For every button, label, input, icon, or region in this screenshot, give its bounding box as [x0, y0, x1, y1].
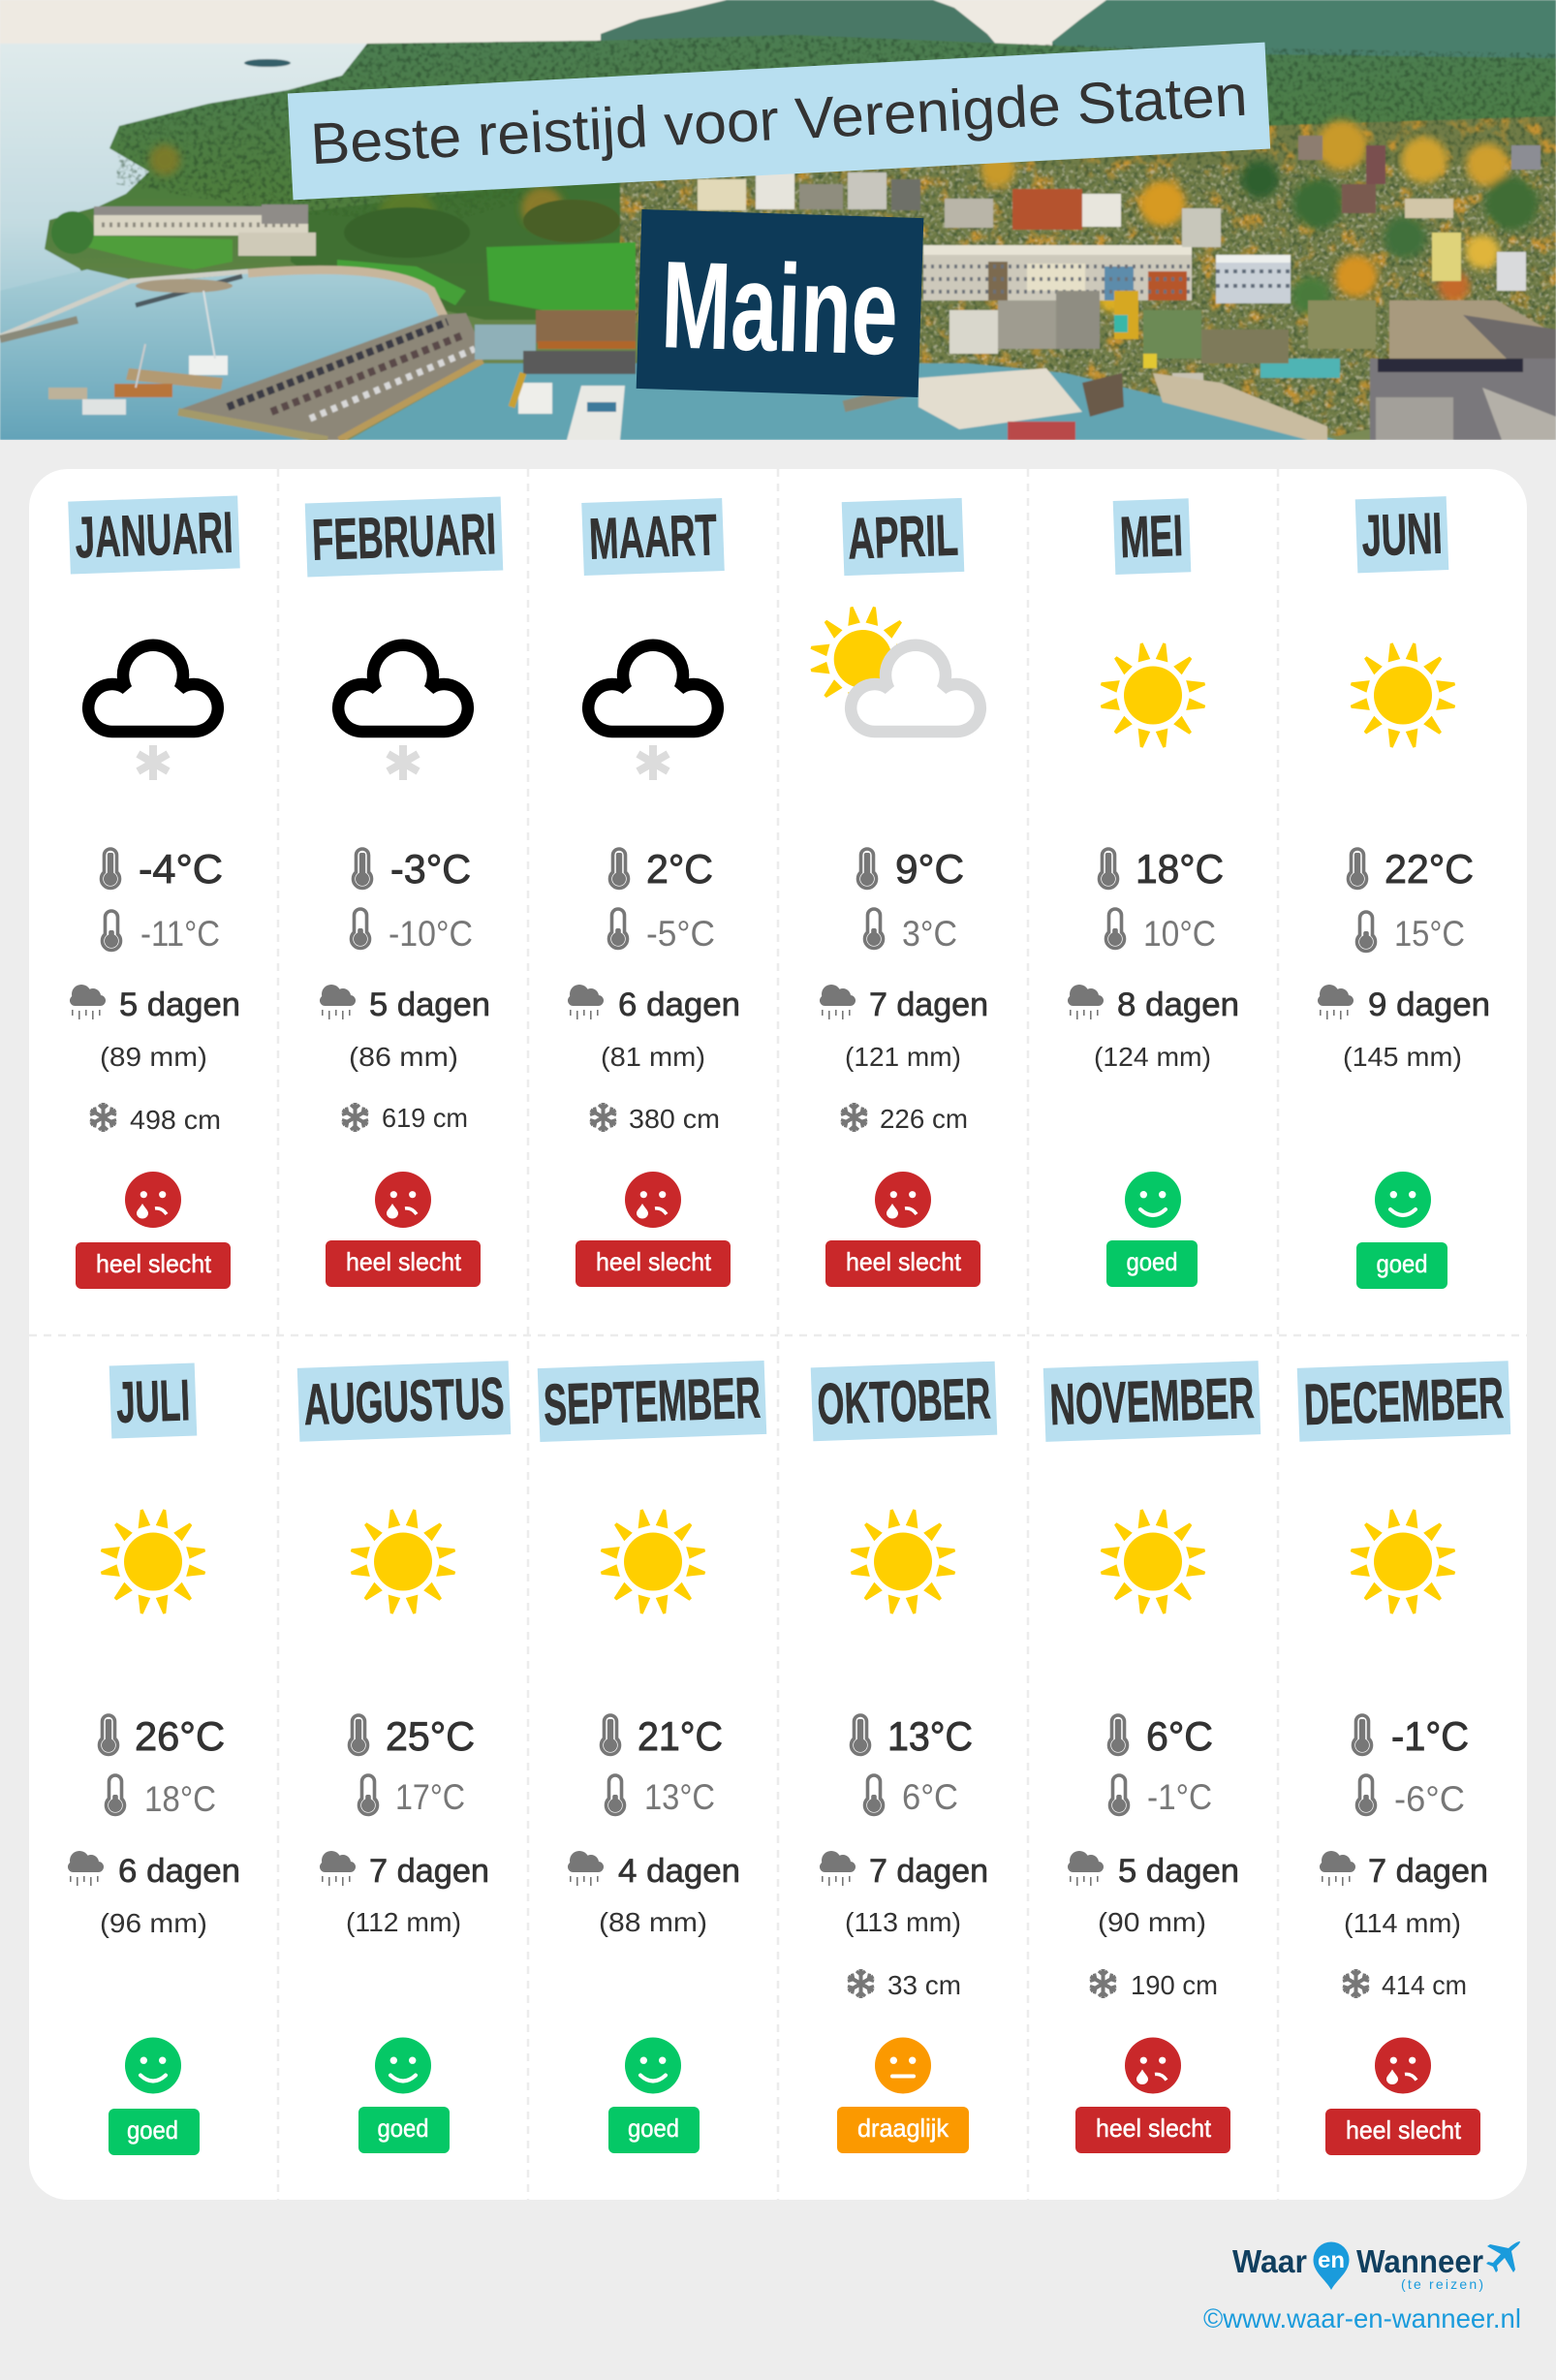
- precipitation: (145 mm): [1343, 1042, 1462, 1072]
- rain days: 6 dagen: [618, 986, 740, 1023]
- icon: thermometer high: [610, 849, 628, 888]
- heading: NOVEMBER: [1048, 1365, 1256, 1437]
- icon: rain: [1320, 1851, 1355, 1886]
- rating face: [1375, 1172, 1431, 1228]
- icon: rain: [320, 985, 356, 1019]
- rating face: [1125, 1172, 1181, 1228]
- website url: ©www.waar-en-wanneer.nl: [1203, 2303, 1521, 2333]
- rating badge: goed: [628, 2114, 679, 2143]
- parking pier: [178, 313, 486, 440]
- icon: map pin: [1314, 2242, 1349, 2290]
- max temperature: 6°C: [1146, 1713, 1213, 1759]
- icon: thermometer low: [607, 1775, 624, 1814]
- rain days: 7 dagen: [869, 986, 988, 1023]
- heading: JANUARI: [74, 500, 234, 570]
- rating face: [125, 2037, 181, 2093]
- min temperature: -6°C: [1394, 1779, 1465, 1819]
- icon: rain: [820, 985, 856, 1019]
- rain days: 5 dagen: [369, 986, 490, 1023]
- rating badge: [608, 2107, 700, 2153]
- title banner: Beste reistijd voor Verenigde Staten: [309, 63, 1249, 176]
- snowfall: 33 cm: [887, 1970, 961, 2000]
- heading: [538, 1361, 766, 1442]
- icon: snowflake: [340, 1103, 370, 1132]
- icon: thermometer high: [1108, 1715, 1128, 1754]
- cell: maart: [568, 498, 740, 1287]
- icon: thermometer high: [1349, 849, 1366, 888]
- icon: thermometer low: [864, 1775, 884, 1814]
- icon: snowflake: [88, 1103, 118, 1132]
- icon: rain: [568, 985, 604, 1019]
- icon: rain: [68, 1851, 104, 1886]
- icon: sun: [100, 1509, 206, 1614]
- icon: snowflake: [588, 1103, 618, 1132]
- min temperature: 15°C: [1394, 914, 1465, 954]
- harbour water and buildings: [349, 363, 1337, 440]
- icon: rain: [568, 1851, 604, 1886]
- max temperature: 22°C: [1385, 846, 1474, 892]
- cell: december: [1297, 1361, 1510, 2155]
- rating badge: heel slecht: [846, 1247, 962, 1276]
- panel: months card: [29, 469, 1527, 2200]
- rain days: 7 dagen: [1368, 1853, 1488, 1890]
- rain days: 7 dagen: [369, 1853, 489, 1890]
- rating face: [625, 1172, 681, 1228]
- heading: [1043, 1361, 1260, 1442]
- snowfall: 380 cm: [629, 1104, 720, 1134]
- precipitation: (89 mm): [100, 1042, 207, 1072]
- max temperature: 9°C: [895, 846, 964, 892]
- icon: rain: [1068, 985, 1104, 1019]
- rating badge: [109, 2109, 200, 2155]
- heading: [305, 496, 503, 578]
- heading: [68, 495, 240, 575]
- icon: cloud with snow: [88, 645, 218, 780]
- rating face: [875, 1172, 931, 1228]
- rating face: [625, 2037, 681, 2093]
- heading: SEPTEMBER: [543, 1365, 762, 1437]
- min temperature: 18°C: [144, 1779, 216, 1819]
- heading: FEBRUARI: [311, 501, 497, 573]
- heading: JULI: [115, 1367, 191, 1435]
- bay water: [0, 269, 448, 440]
- min temperature: 13°C: [644, 1777, 715, 1817]
- rating face: [1125, 2037, 1181, 2093]
- icon: sun: [600, 1509, 706, 1614]
- heading: [1355, 496, 1448, 573]
- precipitation: (86 mm): [349, 1042, 458, 1072]
- icon: thermometer high: [353, 849, 372, 888]
- icon: snowflake: [839, 1103, 869, 1132]
- min temperature: -5°C: [646, 914, 715, 954]
- icon: airplane: [1486, 2241, 1520, 2272]
- icon: thermometer low: [351, 909, 370, 948]
- rating badge: goed: [1376, 1249, 1428, 1278]
- rain days: 6 dagen: [118, 1853, 240, 1890]
- icon: rain: [1318, 985, 1354, 1019]
- cell: november: [1043, 1361, 1260, 2153]
- heading: AUGUSTUS: [302, 1365, 506, 1437]
- rating badge: [825, 1240, 980, 1287]
- icon: rain: [320, 1851, 356, 1886]
- icon: sun behind grey cloud: [810, 606, 980, 732]
- heading: [1113, 498, 1191, 575]
- cell: april: [810, 498, 988, 1287]
- icon: snowflake: [1341, 1969, 1371, 1998]
- max temperature: 2°C: [646, 846, 713, 892]
- heading: JUNI: [1360, 501, 1444, 568]
- hero photo: coastal town of Maine: [0, 0, 1556, 446]
- left building group: [93, 205, 262, 215]
- logo: Waar en Wanneer: (te reizen): [1401, 2276, 1483, 2292]
- max temperature: 25°C: [386, 1713, 475, 1759]
- logo: Waar en Wanneer: [1232, 2241, 1520, 2292]
- cell: juli: [68, 1362, 240, 2155]
- logo: Waar en Wanneer: Waar: [1232, 2243, 1307, 2279]
- rating badge: [1106, 1240, 1198, 1287]
- precipitation: (81 mm): [601, 1042, 705, 1072]
- rain days: 5 dagen: [1118, 1853, 1239, 1890]
- rating badge: heel slecht: [346, 1247, 462, 1276]
- rating badge: [76, 1242, 231, 1289]
- rating badge: heel slecht: [1096, 2114, 1212, 2143]
- heading: MEI: [1119, 503, 1184, 570]
- min temperature: 6°C: [902, 1777, 958, 1817]
- rating badge: heel slecht: [96, 1249, 212, 1278]
- cell: februari: [305, 496, 503, 1287]
- rating badge: [326, 1240, 481, 1287]
- rating badge: goed: [1126, 1247, 1178, 1276]
- rain days: 7 dagen: [869, 1853, 988, 1890]
- min temperature: 3°C: [902, 914, 957, 954]
- rain days: 9 dagen: [1368, 986, 1490, 1023]
- icon: rain: [70, 985, 106, 1019]
- icon: thermometer low: [1106, 909, 1124, 948]
- min temperature: -10°C: [389, 914, 473, 954]
- snowfall: 190 cm: [1131, 1970, 1218, 2000]
- heading: OKTOBER: [816, 1365, 992, 1437]
- icon: thermometer high: [99, 1715, 118, 1754]
- min temperature: -11°C: [140, 914, 220, 954]
- max temperature: 18°C: [1136, 846, 1224, 892]
- icon: thermometer low: [864, 909, 884, 948]
- rating badge: [358, 2107, 450, 2153]
- icon: snowflake: [846, 1969, 876, 1998]
- min temperature: 10°C: [1143, 914, 1216, 954]
- precipitation: (121 mm): [845, 1042, 961, 1072]
- rating face: [875, 2037, 931, 2093]
- snowfall: 226 cm: [880, 1104, 968, 1134]
- precipitation: (114 mm): [1344, 1908, 1461, 1938]
- max temperature: 26°C: [135, 1713, 225, 1759]
- icon: thermometer low: [358, 1775, 378, 1814]
- precipitation: (90 mm): [1098, 1907, 1206, 1937]
- max temperature: 13°C: [887, 1713, 973, 1759]
- icon: sun: [1100, 642, 1206, 748]
- cell: september: [538, 1361, 766, 2153]
- logo: Waar en Wanneer: Wanneer: [1356, 2243, 1483, 2279]
- rating badge: goed: [378, 2114, 428, 2143]
- state name block: Maine: Maine: [660, 235, 900, 382]
- rating badge: [1075, 2107, 1230, 2153]
- icon: thermometer high: [1353, 1715, 1372, 1754]
- icon: thermometer low: [608, 909, 628, 948]
- icon: thermometer high: [101, 849, 120, 888]
- rating badge: heel slecht: [596, 1247, 712, 1276]
- rain days: 8 dagen: [1117, 986, 1239, 1023]
- rating badge: [1325, 2109, 1480, 2155]
- icon: thermometer low: [103, 911, 120, 950]
- title banner: [288, 43, 1270, 200]
- rain days: 5 dagen: [119, 986, 240, 1023]
- rating badge: draaglijk: [857, 2114, 949, 2143]
- rating badge: [837, 2107, 969, 2153]
- icon: thermometer low: [1110, 1775, 1128, 1814]
- snowfall: 619 cm: [382, 1103, 468, 1133]
- icon: thermometer low: [1356, 912, 1376, 951]
- precipitation: (112 mm): [346, 1907, 461, 1937]
- icon: sun: [1350, 1509, 1456, 1614]
- state name block: Maine: [637, 209, 923, 397]
- max temperature: -1°C: [1391, 1713, 1469, 1759]
- icon: rain: [1068, 1851, 1104, 1886]
- logo: Waar en Wanneer: en: [1318, 2247, 1345, 2272]
- max temperature: -4°C: [139, 846, 223, 892]
- rating face: [1375, 2037, 1431, 2093]
- rating badge: [576, 1240, 731, 1287]
- min temperature: 17°C: [395, 1777, 465, 1817]
- rating badge: [1356, 1242, 1447, 1289]
- heading: MAART: [588, 502, 718, 572]
- snowfall: 414 cm: [1382, 1970, 1467, 2000]
- max temperature: -3°C: [390, 846, 471, 892]
- icon: thermometer high: [851, 1715, 870, 1754]
- precipitation: (113 mm): [845, 1907, 961, 1937]
- icon: sun: [1100, 1509, 1206, 1614]
- cell: mei: [1068, 498, 1239, 1287]
- heading: [109, 1362, 197, 1439]
- icon: sun: [850, 1509, 956, 1614]
- max temperature: 21°C: [638, 1713, 723, 1759]
- min temperature: -1°C: [1147, 1777, 1212, 1817]
- rating badge: goed: [127, 2115, 178, 2145]
- snowfall: 498 cm: [130, 1105, 221, 1135]
- icon: cloud with snow: [338, 645, 468, 780]
- icon: thermometer low: [107, 1775, 124, 1814]
- heading: [811, 1362, 997, 1441]
- precipitation: (124 mm): [1094, 1042, 1211, 1072]
- icon: thermometer high: [601, 1715, 620, 1754]
- icon: sun: [1350, 642, 1456, 748]
- precipitation: (88 mm): [599, 1907, 707, 1937]
- rating badge: heel slecht: [1346, 2115, 1462, 2145]
- icon: thermometer high: [858, 849, 876, 888]
- cell: januari: [68, 495, 240, 1289]
- icon: cloud with snow: [588, 645, 718, 780]
- icon: thermometer high: [349, 1715, 368, 1754]
- cell: juni: [1318, 496, 1490, 1289]
- heading: [297, 1361, 511, 1442]
- icon: sun: [350, 1509, 456, 1614]
- rating face: [125, 1172, 181, 1228]
- icon: rain: [820, 1851, 856, 1886]
- heading: APRIL: [847, 503, 959, 571]
- cell: augustus: [297, 1361, 511, 2153]
- icon: thermometer low: [1356, 1775, 1376, 1814]
- rating face: [375, 2037, 431, 2093]
- icon: snowflake: [1088, 1969, 1118, 1998]
- heading: [842, 498, 964, 576]
- precipitation: (96 mm): [100, 1908, 207, 1938]
- rating face: [375, 1172, 431, 1228]
- cell: oktober: [811, 1362, 997, 2153]
- icon: thermometer high: [1099, 849, 1118, 888]
- heading: [581, 498, 725, 576]
- rain days: 4 dagen: [618, 1853, 740, 1890]
